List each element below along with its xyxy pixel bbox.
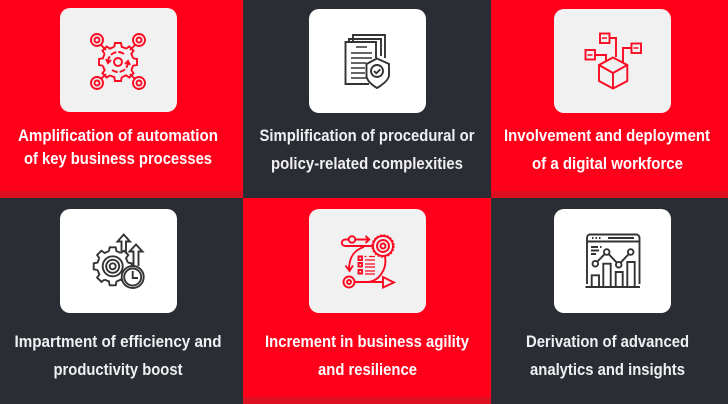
icon: analytics dashboard — [586, 234, 640, 287]
panel: simplification — [243, 0, 491, 198]
text: digital workforce label: of a digital workforce — [532, 155, 683, 173]
text: automation label — [18, 127, 218, 168]
text: analytics label: analytics and insights — [530, 361, 685, 379]
text: efficiency label: productivity boost — [54, 361, 183, 379]
text: agility label: Increment in business agility — [265, 333, 470, 351]
text: agility label — [265, 333, 470, 379]
icon: gear with clock and arrows — [94, 234, 144, 288]
text: analytics label: Derivation of advanced — [526, 333, 689, 351]
text: agility label: and resilience — [318, 361, 417, 379]
text: digital workforce label: Involvement and deployment — [504, 127, 710, 145]
text: analytics label — [526, 333, 689, 379]
icon: gear with four nodes — [91, 34, 145, 89]
icon: box with connected nodes — [586, 34, 641, 88]
panel: analytics — [491, 198, 728, 404]
text: automation label: Amplification of automation — [18, 127, 218, 145]
panel: digital workforce — [491, 0, 728, 198]
icon: documents with shield — [346, 35, 389, 88]
text: digital workforce label — [504, 127, 710, 173]
text: efficiency label — [14, 333, 222, 379]
text: simplification label: policy-related complexities — [271, 155, 463, 173]
text: automation label: of key business processes — [24, 150, 212, 168]
panel: efficiency — [0, 198, 243, 404]
panel: automation — [0, 0, 243, 198]
text: simplification label — [260, 127, 475, 173]
icon: process cycle — [342, 235, 394, 288]
panel: agility — [243, 198, 491, 404]
text: efficiency label: Impartment of efficiency and — [14, 333, 222, 351]
text: simplification label: Simplification of procedural or — [260, 127, 475, 145]
